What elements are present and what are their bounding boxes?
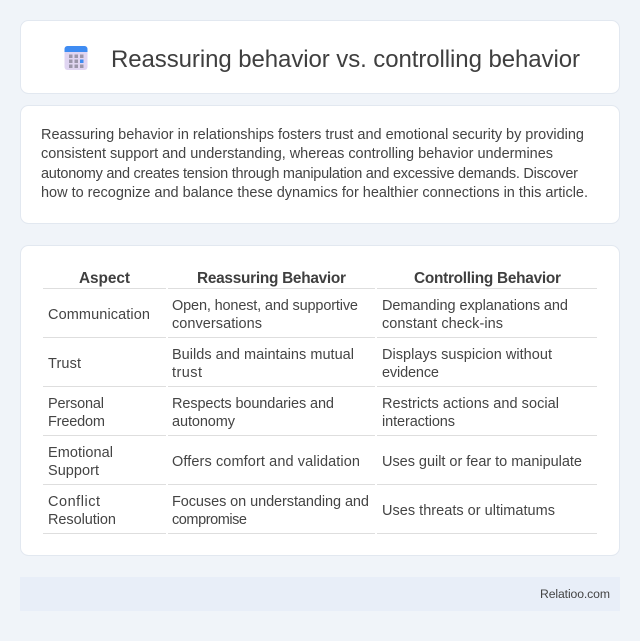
table header: Controlling Behavior <box>414 270 561 287</box>
row: trust: evidence <box>382 365 439 381</box>
row: emotional support: Support <box>48 463 99 479</box>
row: communication: constant check-ins <box>382 316 503 332</box>
row: personal freedom: interactions <box>382 414 455 430</box>
text block: introduction: autonomy and creates tension through manipulation and excessive demands. Discover <box>41 166 578 182</box>
row: trust: Builds and maintains mutual <box>172 347 354 363</box>
table header: Reassuring Behavior <box>197 270 346 287</box>
row: personal freedom: Personal <box>48 396 104 412</box>
row: emotional support: Offers comfort and validation <box>172 454 360 470</box>
row: personal freedom: autonomy <box>172 414 236 430</box>
row: conflict resolution <box>48 494 555 528</box>
row: personal freedom <box>48 396 559 430</box>
row: conflict resolution: Uses threats or ultimatums <box>382 503 555 519</box>
footer <box>20 577 620 611</box>
row: conflict resolution: Resolution <box>48 512 116 528</box>
text block: introduction: consistent support and understanding, whereas controlling behavior undermines <box>41 146 553 162</box>
row: trust: Displays suspicion without <box>382 347 552 363</box>
table header: Aspect <box>79 270 130 287</box>
table header <box>79 270 561 287</box>
row: trust <box>48 347 552 381</box>
row: emotional support: Emotional <box>48 445 113 461</box>
row: trust: trust <box>172 365 202 381</box>
panel: introduction <box>20 106 620 224</box>
row: communication: Open, honest, and supportive <box>172 298 358 314</box>
text block: introduction: how to recognize and balance these dynamics for healthier connections in this article. <box>41 185 588 201</box>
row: communication: Demanding explanations and <box>382 298 568 314</box>
icon: calendar <box>64 46 88 70</box>
row: conflict resolution: Focuses on understanding and <box>172 494 369 510</box>
row: communication <box>48 298 568 332</box>
row: personal freedom: Restricts actions and social <box>382 396 559 412</box>
footer text: Relatioo.com <box>540 587 610 601</box>
row: personal freedom: Respects boundaries and <box>172 396 334 412</box>
row: conflict resolution: Conflict <box>48 494 100 510</box>
row: emotional support <box>48 445 582 479</box>
row: communication: conversations <box>172 316 262 332</box>
text block: introduction <box>41 127 588 201</box>
row: emotional support: Uses guilt or fear to manipulate <box>382 454 582 470</box>
row: conflict resolution: compromise <box>172 512 247 528</box>
panel: header <box>20 20 620 94</box>
row: personal freedom: Freedom <box>48 414 105 430</box>
text block: introduction: Reassuring behavior in relationships fosters trust and emotional security by providing <box>41 127 584 143</box>
row: communication: Communication <box>48 307 150 323</box>
row: trust: Trust <box>48 356 81 372</box>
panel: comparison table <box>20 246 620 556</box>
title: Reassuring behavior vs. controlling behavior <box>111 46 580 73</box>
